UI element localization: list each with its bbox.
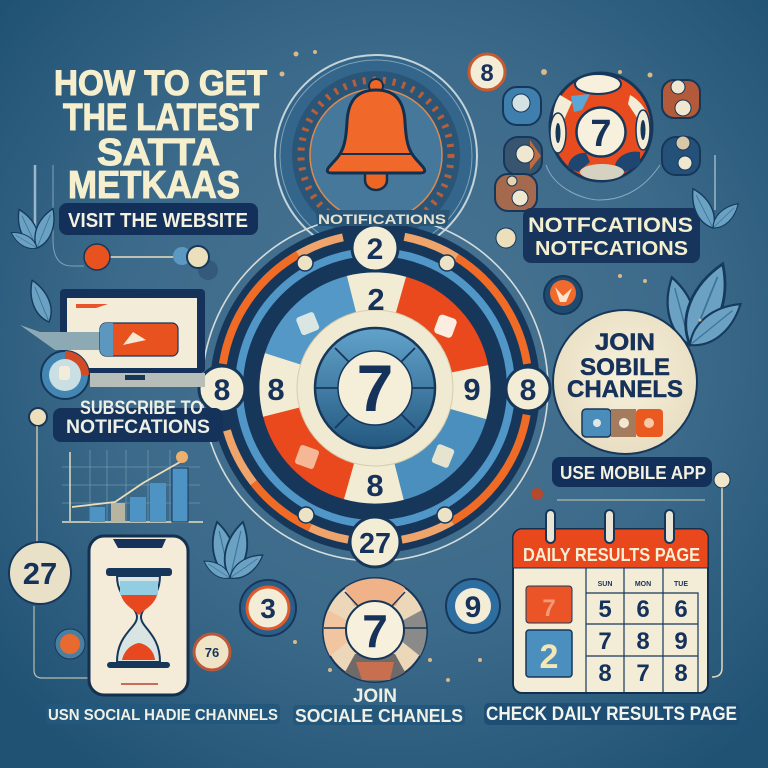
connector: chart to 27 <box>29 408 88 678</box>
icon: phone with hourglass <box>89 536 188 695</box>
calendar numbers <box>598 596 688 687</box>
panel: daily results calendar <box>513 510 708 693</box>
icon: leaves left <box>9 165 60 253</box>
icon: leaves bottom centre <box>201 520 267 584</box>
title: THE LATEST <box>63 97 259 139</box>
icon: small node right of title <box>496 228 516 248</box>
title: HOW TO GET <box>54 64 267 103</box>
icon: ball 3: 3 <box>260 593 276 624</box>
calendar numbers: 7 <box>636 660 650 687</box>
label: join social channels: SOCIALE CHANELS <box>295 706 463 726</box>
sector numbers <box>267 282 481 503</box>
connector: website nodes <box>53 165 218 280</box>
label: subscribe to notifications: NOTIFCATIONS <box>66 417 210 438</box>
title: METKAAS <box>68 164 240 207</box>
icon: dice cluster <box>495 80 700 211</box>
title: SATTA <box>97 132 220 174</box>
label: join social channels: JOIN <box>353 686 397 707</box>
label: check daily results page: CHECK DAILY RESULTS PAGE <box>486 704 737 725</box>
icon: small ball 76 <box>194 634 230 670</box>
panel: join channels circle: SOBILE <box>580 354 670 381</box>
central wheel <box>159 172 591 604</box>
label: subscribe to notifications: SUBSCRIBE TO <box>80 398 203 419</box>
badge numbers: 8 <box>520 374 536 407</box>
sector numbers: 8 <box>267 372 285 407</box>
label: notifications pair: NOTFCATIONS <box>528 214 693 237</box>
icon: social badge <box>544 276 582 314</box>
number badges <box>199 225 550 567</box>
icon: small ball 8: 8 <box>480 60 494 87</box>
bar chart <box>62 450 203 522</box>
icon: ball 7: 7 <box>362 605 388 657</box>
icon: ball 9 <box>446 579 500 633</box>
calendar numbers: 6 <box>636 596 650 623</box>
icon: profile dial <box>41 351 89 399</box>
calendar numbers: 8 <box>674 660 688 687</box>
calendar numbers: 9 <box>674 628 688 655</box>
hub: 7 <box>357 351 393 425</box>
panel: daily results calendar: 2 <box>540 638 558 676</box>
panel: join channels circle: CHANELS <box>567 376 683 403</box>
icon: laptop <box>20 277 205 399</box>
calendar numbers: 8 <box>636 628 650 655</box>
panel: join channels circle <box>553 310 697 454</box>
label: social media channels: USN SOCIAL HADIE CHANNELS <box>48 707 278 724</box>
badge numbers: 2 <box>367 233 383 266</box>
panel: daily results calendar: 7 <box>542 595 556 622</box>
badge numbers: 8 <box>214 374 230 407</box>
wheel sectors <box>254 267 496 509</box>
label: join social channels <box>293 686 465 726</box>
icon: top right lottery ball: 7 <box>590 113 612 155</box>
icon: leaves top right <box>686 155 743 233</box>
icon: notification bell with dial <box>275 55 477 257</box>
label: notifications pair <box>523 208 700 263</box>
icon: small ball 76: 76 <box>205 645 219 660</box>
decorative specks <box>280 50 702 682</box>
title <box>54 64 267 207</box>
badge numbers <box>214 233 536 560</box>
panel: daily results calendar: SUN <box>598 581 612 588</box>
panel: daily results calendar: MON <box>635 581 651 588</box>
sector icons <box>294 311 458 470</box>
calendar numbers: 5 <box>598 596 612 623</box>
icon: small ball 8 <box>469 54 505 90</box>
icon: badge 27: 27 <box>23 556 57 591</box>
label: visit the website: VISIT THE WEBSITE <box>68 210 248 232</box>
sector numbers: 2 <box>367 282 385 317</box>
calendar numbers: 8 <box>598 660 612 687</box>
label: notifications pair: NOTFCATIONS <box>535 238 688 260</box>
ring beads <box>297 255 455 523</box>
icon: leaves large right <box>660 258 748 354</box>
panel: daily results calendar: DAILY RESULTS PAGE <box>523 545 700 565</box>
calendar numbers: 7 <box>598 628 612 655</box>
panel: daily results calendar: TUE <box>674 581 688 588</box>
icon: ball 3 <box>240 580 296 636</box>
label: notifications under bell: NOTIFICATIONS <box>318 211 446 227</box>
icon: small orange badge <box>55 629 85 659</box>
label: visit the website <box>59 203 258 235</box>
label: subscribe to notifications <box>53 398 223 442</box>
hub <box>297 310 453 466</box>
icon: top right lottery ball <box>546 73 660 200</box>
badge numbers: 27 <box>359 528 391 560</box>
connector: app to calendar <box>531 472 730 677</box>
sector numbers: 9 <box>463 372 481 407</box>
label: use mobile app <box>552 457 712 487</box>
panel: join channels circle: JOIN <box>595 329 655 356</box>
icon: ball 9: 9 <box>465 591 481 624</box>
icon: ball 7 <box>323 578 427 682</box>
icon: badge 27 <box>9 542 71 604</box>
label: use mobile app: USE MOBILE APP <box>560 463 706 483</box>
calendar numbers: 6 <box>674 596 688 623</box>
sector numbers: 8 <box>366 468 384 503</box>
calendar rings <box>546 510 674 543</box>
hourglass <box>106 568 172 668</box>
